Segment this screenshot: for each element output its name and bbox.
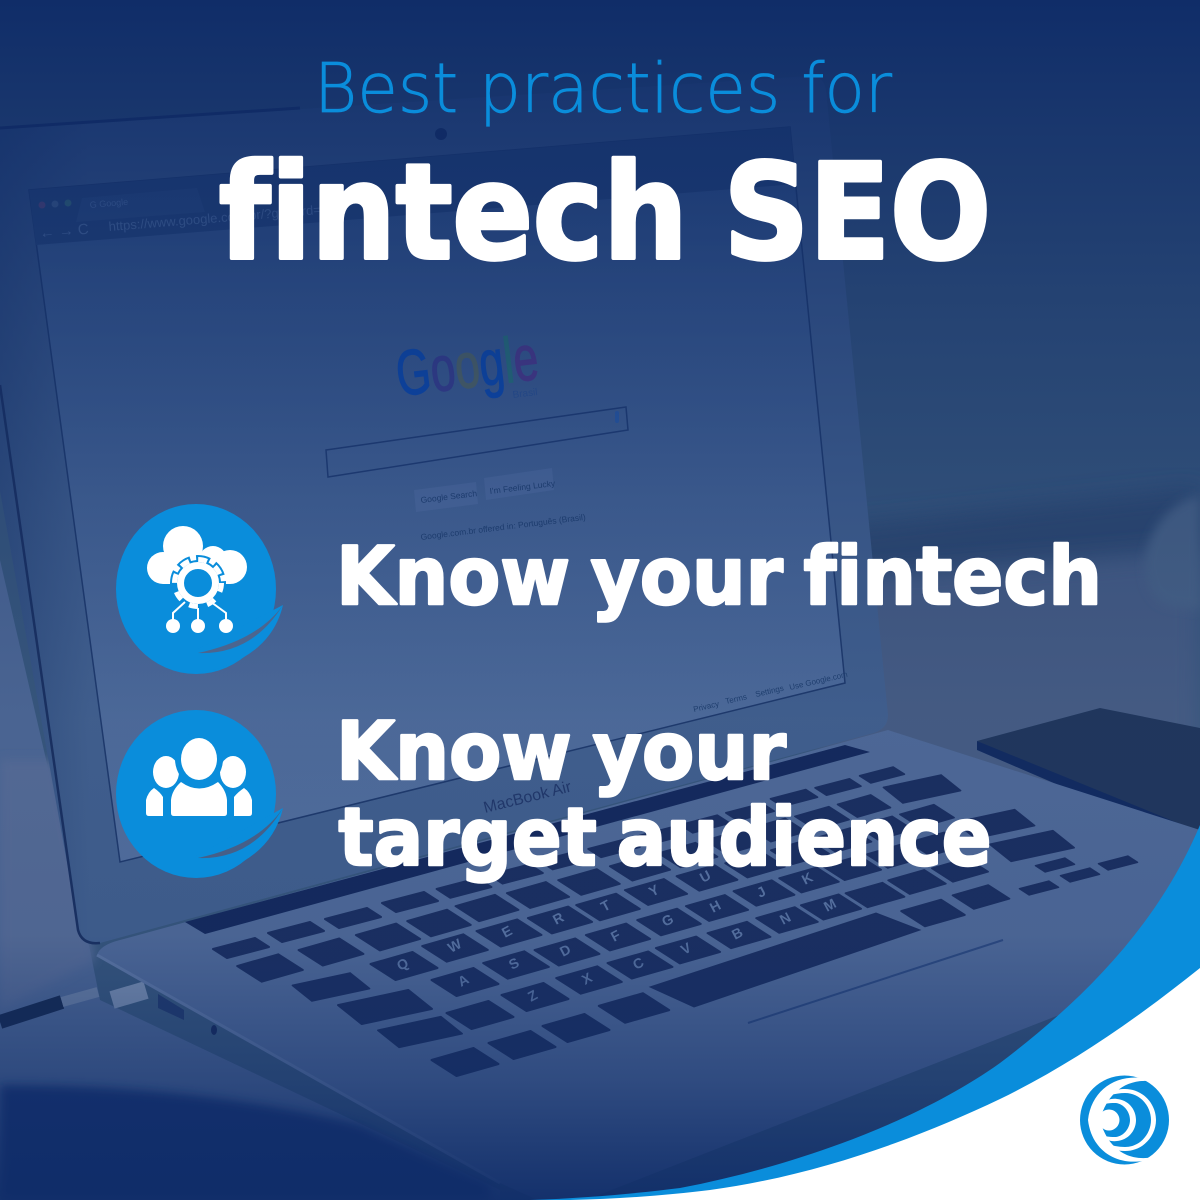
key letters: V xyxy=(678,939,694,958)
key letters: Q xyxy=(394,954,411,974)
footer links: Use Google.com xyxy=(788,670,849,692)
key letters: Y xyxy=(646,881,662,900)
browser traffic lights xyxy=(38,200,72,208)
icon: people group xyxy=(116,710,283,878)
footer links: Terms xyxy=(724,692,748,706)
key letters: T xyxy=(598,896,613,915)
key letters: H xyxy=(707,897,723,916)
microphone xyxy=(615,411,619,423)
icon: cloud with gear xyxy=(116,504,283,674)
search buttons xyxy=(414,468,554,512)
text: Know your fintech: Know your fintech xyxy=(336,530,1102,623)
footer links: Settings xyxy=(754,684,785,699)
key letters: F xyxy=(608,926,623,945)
text: Know your target audience: Know your xyxy=(336,705,787,798)
connector nodes xyxy=(173,602,226,622)
button label: feeling lucky: I'm Feeling Lucky xyxy=(489,478,556,496)
webcam xyxy=(435,128,447,140)
language line: Google.com.br offered in: Português (Brasil) xyxy=(420,512,586,542)
corner: white xyxy=(570,968,1200,1200)
phone on desk xyxy=(977,708,1200,842)
title: fintech SEO: fintech SEO xyxy=(219,136,991,290)
text: Know your target audience: target audience xyxy=(338,791,992,884)
laptop screen xyxy=(29,127,845,862)
key letters: C xyxy=(630,954,646,973)
macbook label: MacBook Air xyxy=(482,778,574,817)
address bar url: https://www.google.com.br/?gws_rd=ssl xyxy=(108,201,337,234)
laptop lid xyxy=(0,76,888,944)
key letters: S xyxy=(506,954,522,973)
keyboard keys xyxy=(213,767,1138,1076)
key letters: K xyxy=(799,869,815,888)
key letters: G xyxy=(659,910,676,930)
dark object bottom-left xyxy=(0,1085,490,1200)
google brasil: Brasil xyxy=(512,387,538,401)
key letters: W xyxy=(445,935,465,956)
search box xyxy=(326,407,628,477)
desk left xyxy=(0,560,500,1200)
key letters: U xyxy=(697,867,713,886)
key letters: D xyxy=(557,941,573,960)
trackpad edge xyxy=(748,940,1003,1023)
lid top shadow line xyxy=(0,108,300,128)
blurred object on desk xyxy=(1145,495,1200,610)
tab title: G Google xyxy=(89,197,129,210)
laptop base xyxy=(97,730,1200,1200)
browser nav icons: ← → C xyxy=(39,221,89,242)
hinge xyxy=(185,745,870,934)
browser tab xyxy=(76,188,205,222)
key letters: N xyxy=(777,909,793,928)
cable and charger xyxy=(0,990,146,1022)
cloud xyxy=(147,526,247,584)
footer links: Privacy xyxy=(692,699,720,714)
browser chrome bar xyxy=(29,127,796,245)
key letters: A xyxy=(455,971,471,990)
key letters: E xyxy=(499,922,515,941)
key letters: Z xyxy=(525,986,540,1005)
lid outer edge xyxy=(0,385,100,943)
footer links xyxy=(692,670,849,714)
base front edge xyxy=(97,955,500,1183)
key letters: J xyxy=(754,883,768,901)
book edge xyxy=(0,760,95,1010)
key letters: B xyxy=(729,924,745,943)
button label: google search: Google Search xyxy=(420,488,478,505)
google logo: Google xyxy=(392,321,542,410)
text: Know your target audience xyxy=(336,705,992,884)
corner band: blue xyxy=(530,825,1200,1200)
gear xyxy=(174,560,222,606)
key letters: R xyxy=(550,909,566,928)
key letters: M xyxy=(821,895,839,915)
key letters xyxy=(394,867,839,1005)
key letters: X xyxy=(579,969,595,988)
title: Best practices for: Best practices for xyxy=(314,49,893,129)
logo: spiral xyxy=(1080,1076,1169,1164)
usb port and audio jack xyxy=(158,994,217,1035)
